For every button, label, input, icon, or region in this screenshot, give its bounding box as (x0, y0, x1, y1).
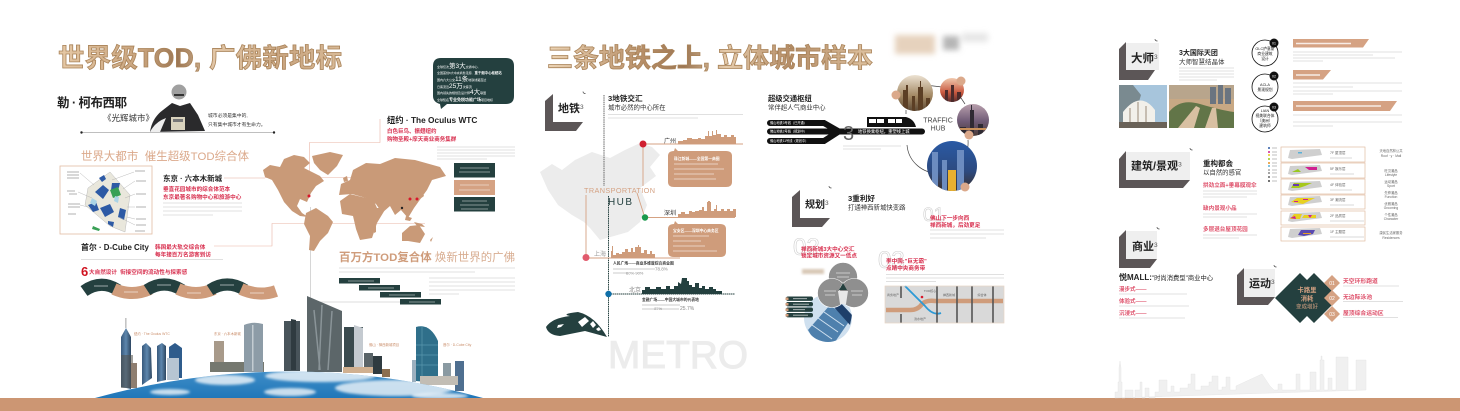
bottom band (0, 398, 1460, 411)
diagram: venn of three centres (786, 262, 868, 342)
text block: metro interchange (608, 93, 743, 118)
map connector lines (214, 119, 440, 302)
text block: million-square TOD body (339, 268, 515, 304)
building section labels: Grooming (1384, 206, 1398, 210)
section badge: commerce (1119, 227, 1160, 268)
section badge: sport: 3 (1271, 279, 1275, 286)
callout: statistics speech bubble: 国内领先的规划及设计师4大联盟 (437, 87, 486, 96)
section badge: planning: 规划 (805, 200, 825, 211)
floor labels: 4F 体验层 (1330, 182, 1346, 187)
floor plan legend (1268, 147, 1277, 182)
text block: Shanghai: 人民广场——商业多维度综合商业圈 (613, 260, 674, 266)
diagram: three lines merging into one: 佛山地铁3号线（已开通） (770, 120, 807, 125)
text block: benefit 01: 佛山下一步向西 (930, 214, 970, 222)
text block: benefit 03: 李中国:"巨无霸" (886, 257, 927, 265)
floor plan shapes (1288, 149, 1322, 238)
text block: metro interchange: 城市必然的中心所在 (608, 102, 666, 112)
text block: sport items (1343, 277, 1403, 318)
design firm circles: LIAN (1261, 109, 1269, 113)
callout: statistics speech bubble: 日客流近25万次客流 (437, 82, 472, 90)
building section labels: Function (1385, 195, 1397, 199)
wave ribbon of six design points (84, 284, 276, 294)
floor labels: 7F 屋顶层 (1330, 150, 1346, 155)
Shenzhen skyline (664, 201, 736, 217)
callout: statistics speech bubble: 国内六大公交11条地铁线路直达 (437, 74, 486, 83)
text block: Shanghai: 78.8% (655, 266, 668, 272)
book title: 《光辉城市》 (103, 113, 154, 123)
text block: Beijing: 85% (654, 306, 662, 311)
icon: bullet train (546, 312, 607, 337)
text block: masters (1179, 48, 1234, 80)
text block: Beijing: 金融广场——中国大城市的代表地 (642, 297, 699, 302)
floor labels: 1F 主题层 (1330, 229, 1346, 234)
photo: canopy architecture (1119, 85, 1167, 128)
blurred tag (802, 269, 824, 274)
building section labels: 优雅潮品 (1384, 201, 1398, 206)
text block: architecture and landscape (1203, 158, 1257, 238)
Guangzhou skyline (664, 130, 736, 145)
photo circle: dusk tower (957, 104, 989, 136)
green label tabs (786, 296, 813, 317)
name heading: 勒 · 柯布西耶 (57, 95, 127, 110)
design firm circles: GLC庐意斯 (1255, 46, 1275, 51)
text block: New York Oculus: 购物圣殿+摩天商业商务集群 (387, 135, 457, 143)
Seoul towers (412, 326, 464, 391)
towers on the globe (121, 296, 472, 391)
Shanghai skyline: 上海 (594, 250, 606, 258)
design firm circles (1252, 38, 1278, 132)
text block: architecture and landscape: 拱劲立面+垂幕膜观伞 (1203, 181, 1257, 189)
text block: commerce: 沉浸式—— (1119, 309, 1147, 317)
diagram: three lines merging into one: 3 (843, 123, 854, 145)
location map (885, 286, 1004, 323)
text block: three benefits: 打通禅西新城快变路 (848, 202, 906, 212)
diamonds: calorie callout: 卡路里 (1298, 285, 1316, 294)
train icon (867, 117, 916, 127)
text block: architecture and landscape: 以自然的感官 (1203, 168, 1241, 176)
heading: global metropolis: 世界大都市 催生超级TOD综合体 (81, 149, 250, 163)
tan route lines (586, 144, 743, 258)
floor labels: 2F 品质层 (1330, 213, 1346, 218)
metro hub route diagram (582, 95, 743, 337)
world map (263, 152, 446, 251)
location map: 禅西新城 (943, 292, 955, 297)
hub label: TRAFFIC (923, 118, 953, 124)
panel: Tokyo Roppongi site plan (60, 166, 152, 234)
text block: Tokyo Roppongi (163, 173, 265, 215)
hub label: TRANSPORTATION (584, 186, 655, 195)
title: three metro lines: 三条地铁之上, 立体城市样本 (547, 43, 873, 73)
numbered tan diamonds: 03 (1329, 312, 1335, 318)
diamonds: calorie callout (1275, 273, 1339, 323)
building section labels (1379, 148, 1403, 240)
Shanghai skyline (594, 245, 655, 258)
section badge: architecture and landscape (1119, 148, 1192, 188)
tower captions (134, 331, 472, 347)
section badge: planning: 3 (825, 200, 829, 207)
text block: sport items: 无边际泳池 (1343, 293, 1372, 301)
section badge: planning (792, 186, 832, 227)
text block: commerce: 漫步式—— (1119, 285, 1147, 293)
design firm circles: 02 (1272, 74, 1276, 78)
floor labels: 5F 娱乐层 (1330, 166, 1346, 171)
Beijing skyline (629, 278, 722, 294)
text block: New York Oculus: 白色巨鸟、振翅纽约 (387, 127, 437, 135)
photo: landscape at dusk (1169, 85, 1234, 128)
text block: sport items: 天空环形跑道 (1343, 277, 1378, 285)
text block: benefit 01: 禅西新城，后劲更足 (930, 221, 981, 229)
text block: Beijing (642, 297, 699, 312)
callout: statistics speech bubble: 全球仅次第3大交通中心, (437, 61, 479, 70)
text block: Seoul D-Cube City: 每年接百万名游客到访 (155, 250, 211, 258)
quote text: 只有集中城市才有生命力。 (208, 121, 266, 128)
diagram: three lines merging into one: 地铁换乘枢纽，重塑线上城 (858, 128, 910, 135)
design firm circles: 建筑师 (1259, 123, 1271, 128)
callout: statistics speech bubble (433, 58, 514, 109)
panel: Le Corbusier quote (57, 84, 275, 134)
heading: million-square TOD: 百万方TOD复合体 焕新世界的广佛 (339, 250, 515, 264)
building section labels: Residences (1382, 236, 1400, 240)
callout: Guangzhou stats: 珠江新城——全国第一商圈 (674, 156, 720, 161)
feature boxes: New York (454, 163, 495, 212)
text block: benefit 02: 禅西新城3大中心交汇 (801, 245, 855, 253)
numbered tan diamonds: 01 (1329, 281, 1335, 287)
floor plans table (1281, 147, 1365, 241)
diagram: three lines merging into one: 佛山地铁11号线（规划中） (770, 138, 808, 143)
diagram: traffic hub photo ring (892, 75, 989, 192)
design firm circles: 03 (1272, 105, 1276, 109)
design firm circles: （澳洲） (1257, 118, 1273, 123)
text block: Seoul D-Cube City (81, 242, 223, 260)
photo circle: sunset city (940, 78, 964, 102)
hub ring arc (906, 85, 968, 173)
section badge: masters (1119, 39, 1159, 80)
blue glass photo circle (804, 294, 852, 342)
globe (95, 372, 483, 398)
diagram: three lines merging into one (770, 117, 922, 149)
text block: Beijing: 25.7% (680, 306, 695, 312)
diagram: three lines merging into one: 佛山地铁2号线（规划中） (770, 129, 807, 134)
text block: benefit 01: 01 (923, 205, 944, 226)
timeline rule (80, 131, 275, 134)
text block: six design points (81, 264, 188, 279)
quote text: 城市必须是集中的, (208, 112, 248, 119)
section badge: commerce: 3 (1154, 242, 1158, 249)
section badge: metro: 地铁 (558, 103, 580, 115)
design firm circles: 01 (1272, 41, 1276, 45)
section badge: masters: 3 (1154, 54, 1158, 61)
text block: New York Oculus: 纽约 · The Oculus WTC (387, 115, 477, 125)
text block: architecture and landscape: 缺内景观小品 (1203, 204, 1237, 212)
section badge: metro: 3 (580, 104, 584, 111)
dashed vertical lines (603, 95, 605, 186)
section badge: sport: 运动 (1249, 278, 1271, 290)
section badge: metro (545, 92, 586, 131)
stepped tabs (339, 278, 441, 304)
text block: commerce: 悦MALL:"时尚消费型"商业中心 (1119, 272, 1214, 282)
text block: masters: 3大国际天团 (1179, 48, 1218, 57)
text block: Tokyo Roppongi: 东京 · 六本木新城 (163, 173, 223, 183)
building section labels: 运动潮品 (1384, 179, 1398, 184)
text block: Tokyo Roppongi: 东京最著名购物中心和旅游中心 (163, 193, 242, 201)
building section labels: Roof · y · Mall (1381, 154, 1402, 158)
text block: three benefits: 3重利好 (848, 193, 875, 203)
design firm circles: 视美联合体 (1256, 113, 1275, 118)
design firm circles: ACLA (1260, 83, 1270, 87)
design firm circles: 景观规划 (1257, 87, 1273, 92)
text block: benefit 03 (878, 247, 1004, 282)
text block: architecture and landscape: 重构都会 (1203, 158, 1233, 168)
circle tags (892, 76, 974, 192)
text block: three benefits (848, 193, 906, 212)
building section labels: 个性潮品 (1384, 212, 1398, 217)
text block: New York Oculus (387, 115, 515, 159)
map location markers (308, 194, 418, 209)
floor labels (1330, 150, 1346, 234)
building section labels: 先锋潮品 (1384, 190, 1398, 195)
text block: benefit 03: 03 (878, 247, 905, 274)
text block: super traffic hub: 超级交通枢纽 (768, 94, 812, 103)
callout: Shenzhen stats (668, 221, 726, 257)
Hong Kong and Foshan towers (284, 296, 390, 377)
section badge: sport (1237, 265, 1276, 305)
building section labels: 旺汉潮品 (1384, 168, 1398, 173)
floor labels: 3F 潮流层 (1330, 197, 1346, 202)
text block: Tokyo Roppongi: 垂直花园城市的综合体范本 (163, 185, 231, 193)
building section labels: 天地自然林公共 (1379, 148, 1403, 153)
location map: TOD核心 (924, 288, 936, 293)
photo circle: night city (927, 141, 977, 191)
faint city skyline (1115, 356, 1366, 398)
China map (540, 143, 660, 240)
tower captions: 东京 · 六本木新城 (214, 331, 241, 336)
hub label: HUB (931, 126, 946, 132)
text block: super traffic hub (768, 94, 826, 112)
text block: benefit 02 (793, 234, 857, 261)
building section labels: Lifestyle (1385, 173, 1397, 177)
section badge: masters: 大师 (1131, 53, 1154, 65)
portrait of Le Corbusier (150, 84, 205, 132)
location map: 综合体 (977, 292, 987, 297)
location map: 商务地产 (887, 292, 899, 297)
text block: benefit 01 (923, 205, 1004, 238)
hub label (923, 118, 953, 132)
diamonds: calorie callout: 消耗 (1301, 294, 1314, 302)
building section labels: Character (1384, 217, 1399, 221)
Beijing skyline: 北京 (629, 286, 641, 294)
text block: metro interchange: 3地铁交汇 (608, 93, 643, 103)
station dots (582, 140, 648, 297)
photo circle: skyline (897, 75, 933, 111)
design firm circles: 商业建筑 (1257, 51, 1273, 56)
tower captions: 首尔 · D-Cube City (443, 342, 472, 347)
text block: benefit 02: 02 (793, 234, 820, 261)
Roppongi towers (210, 323, 264, 372)
Oculus WTC towers (121, 318, 182, 389)
tower captions: 纽约 · The Oculus WTC (134, 331, 170, 336)
design firm circles: 设计 (1261, 56, 1269, 61)
quote text (208, 112, 266, 128)
callout: Guangzhou stats (668, 148, 732, 187)
text block: architecture and landscape: 多层退台屋顶花园 (1203, 225, 1248, 233)
tower captions: 佛山 · 禅西新城项目 (369, 342, 399, 347)
text block: Seoul D-Cube City: 韩国最大轨交综合体 (155, 243, 206, 251)
text block: masters: 大师智慧结晶体 (1179, 57, 1225, 66)
Guangzhou skyline: 广州 (664, 137, 676, 145)
blurred logo (895, 33, 988, 54)
text block: benefit 03: 点睛中央商务带 (886, 264, 926, 272)
Shenzhen skyline: 深圳 (664, 209, 676, 217)
section badge: architecture and landscape: 建筑/景观 (1131, 160, 1178, 172)
location map: 滨水地产 (914, 316, 926, 321)
section badge: architecture and landscape: 3 (1178, 162, 1182, 168)
text block: super traffic hub: 常伴超人气商业中心 (768, 102, 826, 112)
diamonds: calorie callout: 变成增好 (1296, 302, 1318, 310)
text block: commerce: 体验式—— (1119, 297, 1147, 305)
callout: statistics speech bubble: 全球知名专业免税功能广场项目地标 (437, 96, 493, 102)
text block: benefit 02: 锁定城市资源又一低点 (801, 252, 857, 260)
building section labels: Sport (1387, 184, 1395, 188)
text block: commerce (1119, 272, 1214, 318)
text block: Shanghai (613, 260, 674, 276)
callout: Shenzhen stats: 宝安区——深圳中心商务区 (673, 228, 719, 233)
text block: six design points: 6 (81, 264, 88, 279)
text block: Seoul D-Cube City: 首尔 · D-Cube City (81, 242, 150, 252)
title: world-class TOD: 世界级TOD, 广佛新地标 (58, 43, 342, 73)
watermark word METRO: METRO (608, 334, 748, 377)
design firm descriptions (1293, 39, 1402, 126)
text block: sport items: 屋顶综合运动区 (1343, 309, 1384, 317)
text block: Shanghai: 80%-90% (626, 270, 644, 276)
numbered tan diamonds: 02 (1329, 296, 1335, 302)
callout: statistics speech bubble: 全国首创6大中央商务走廊, 重于烟中心枢纽站 (437, 70, 502, 75)
numbered tan diamonds (1324, 275, 1340, 322)
building section labels: 康民生活家服务 (1379, 230, 1403, 235)
text block: six design points: 大自然设计 衔接空间的流动性与探索感 (89, 268, 188, 276)
hub word: HUB (608, 197, 632, 208)
section badge: commerce: 商业 (1132, 241, 1154, 253)
